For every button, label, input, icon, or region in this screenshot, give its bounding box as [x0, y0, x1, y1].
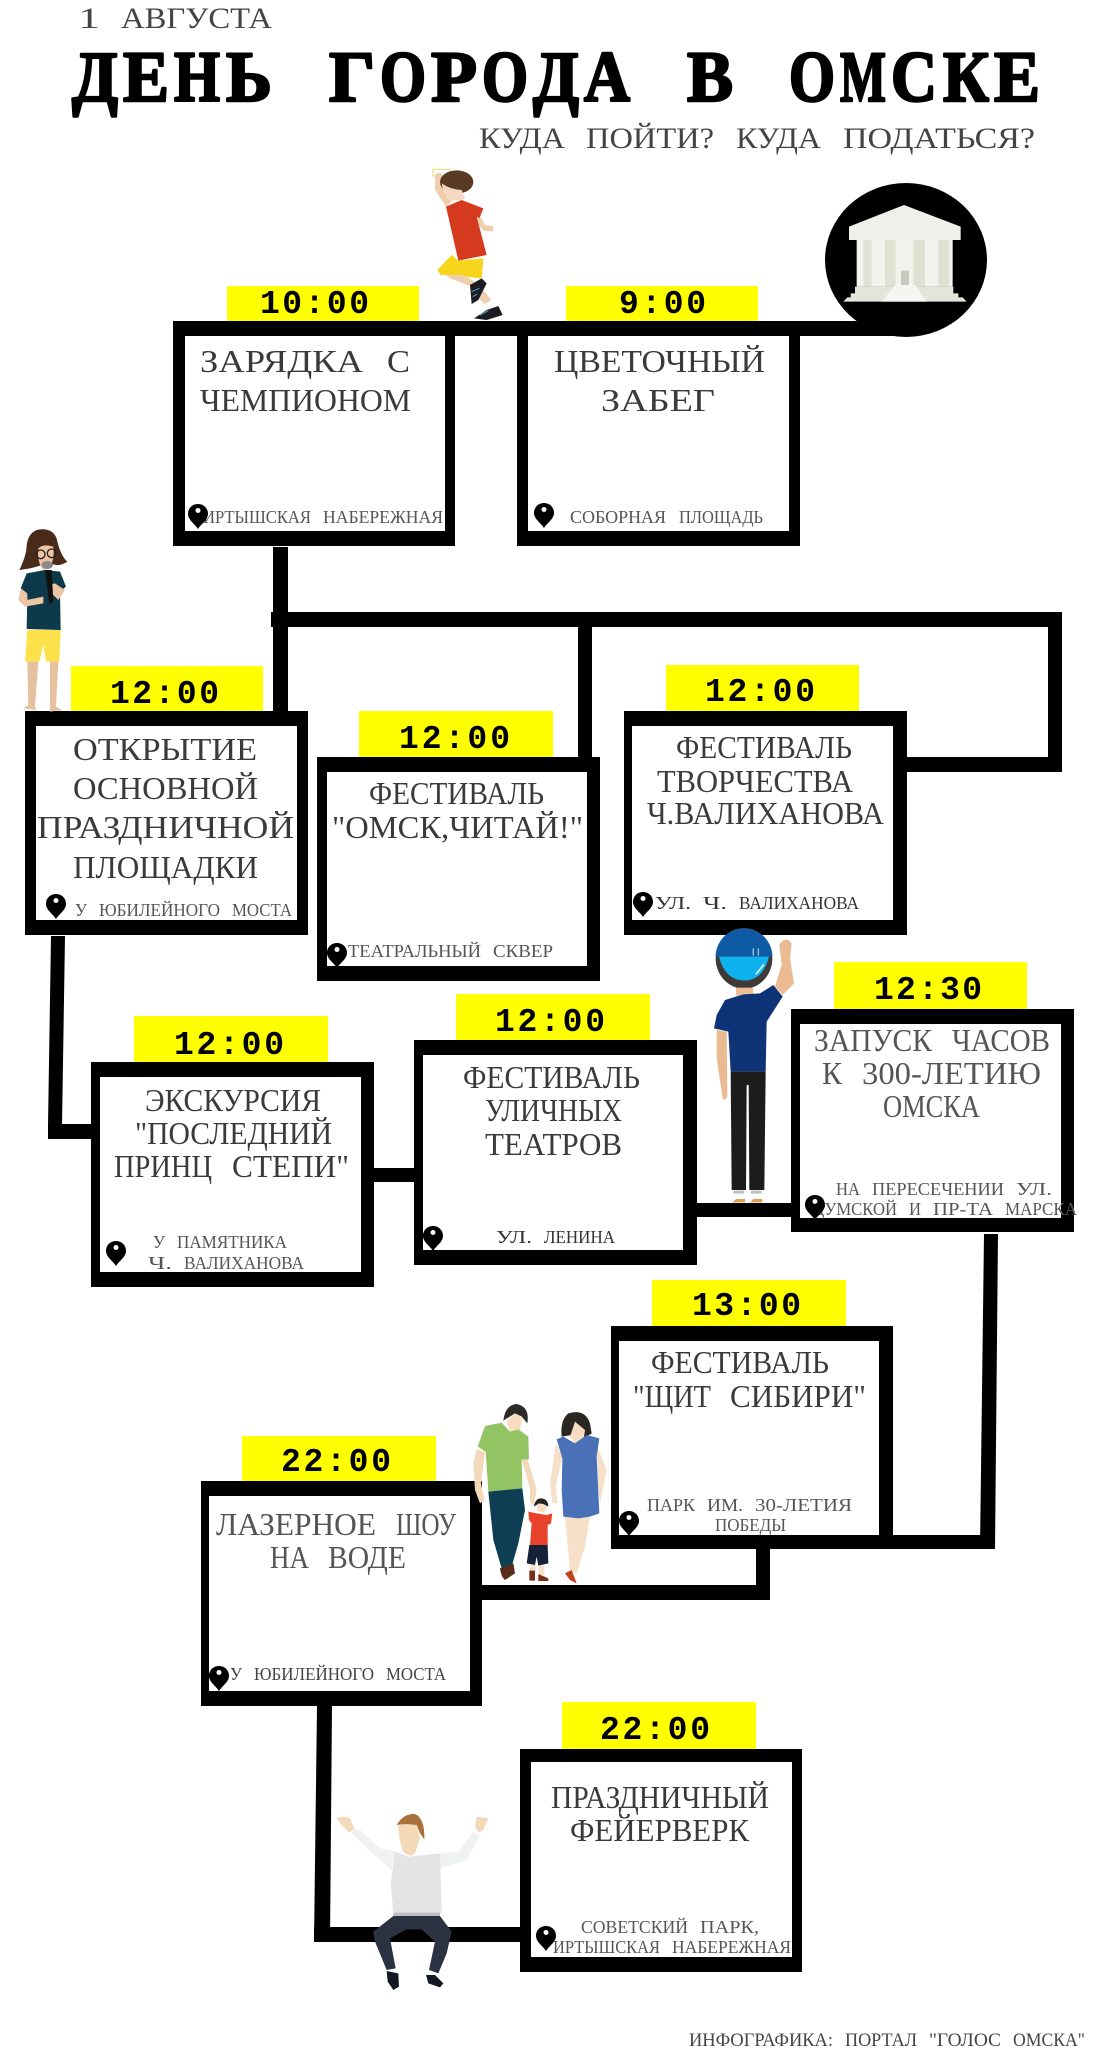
- subtitle: КУДА: [736, 122, 821, 155]
- event name: С: [387, 343, 410, 379]
- credit: ОМСКА": [1013, 2030, 1085, 2051]
- icon: pin: [327, 943, 347, 968]
- event name: ЧЕМПИОНОМ: [200, 382, 411, 418]
- time: 12:00: [174, 1027, 284, 1064]
- panel: 12:00 main stage opening: [25, 666, 308, 935]
- location: ПАРК,: [700, 1917, 759, 1937]
- event name: ФЕЙЕРВЕРК: [570, 1812, 750, 1848]
- event name: ОТКРЫТИЕ: [73, 731, 257, 767]
- icon: pin: [619, 1511, 639, 1536]
- event name: ПРАЗДНИЧНОЙ: [37, 809, 294, 845]
- location: И: [909, 1199, 921, 1219]
- figure: man setting the clock: [714, 928, 794, 1202]
- event name: К: [822, 1055, 843, 1091]
- panel: 10:00 warm-up: [173, 286, 455, 546]
- location: НА: [836, 1179, 860, 1199]
- event name: ЭКСКУРСИЯ: [145, 1082, 321, 1118]
- location: ПР-ТА: [933, 1199, 993, 1219]
- location: ПЕРЕСЕЧЕНИИ: [872, 1179, 1004, 1199]
- location: ЮБИЛЕЙНОГО: [254, 1664, 374, 1684]
- time: 12:00: [495, 1004, 605, 1041]
- event name: ПРИНЦ: [114, 1148, 212, 1184]
- event name: ЦВЕТОЧНЫЙ: [554, 343, 765, 379]
- location: ДУМСКОЙ: [813, 1199, 897, 1219]
- panel: 12:00 street theatres: [414, 994, 697, 1265]
- time: 12:00: [705, 674, 815, 711]
- time: 13:00: [692, 1288, 801, 1325]
- location: СКВЕР: [493, 941, 553, 961]
- credit: ПОРТАЛ: [845, 2030, 917, 2051]
- title: О: [380, 37, 426, 117]
- event name: "ЩИТ: [633, 1378, 711, 1414]
- event name: ПРАЗДНИЧНЫЙ: [551, 1779, 769, 1815]
- event name: "ОМСК,ЧИТАЙ!": [332, 809, 583, 845]
- location: СОВЕТСКИЙ: [581, 1917, 688, 1937]
- event name: ОСНОВНОЙ: [73, 770, 258, 806]
- icon: pin: [106, 1241, 126, 1266]
- location: ТЕАТРАЛЬНЫЙ: [348, 941, 481, 961]
- event name: СИБИРИ": [730, 1378, 866, 1414]
- panel: 12:00 Valikhanov festival: [624, 665, 907, 935]
- panel: 12:30 clock launch: [791, 962, 1077, 1232]
- figure: seated man: [337, 1814, 488, 1990]
- icon: pin: [805, 1195, 825, 1220]
- location: ПАРК: [647, 1495, 696, 1515]
- event name: ФЕСТИВАЛЬ: [651, 1344, 829, 1380]
- panel: 22:00 fireworks: [520, 1702, 802, 1972]
- event name: УЛИЧНЫХ: [485, 1092, 622, 1128]
- location: УЛ.: [655, 893, 691, 913]
- title: Ь: [226, 37, 272, 117]
- location: У: [230, 1664, 242, 1684]
- figure: runner: [433, 169, 503, 320]
- event name: ПЛОЩАДКИ: [73, 849, 258, 885]
- icon: pin: [534, 503, 554, 528]
- event name: ЗАБЕГ: [601, 382, 715, 418]
- panel: 12:00 Omsk read festival: [317, 711, 600, 981]
- time: 22:00: [281, 1444, 391, 1481]
- time: 9:00: [619, 286, 706, 323]
- event name: 300-ЛЕТИЮ: [862, 1055, 1041, 1091]
- event name: ФЕСТИВАЛЬ: [369, 775, 544, 811]
- figure: woman with microphone: [18, 529, 67, 712]
- credit: "ГОЛОС: [929, 2030, 1001, 2051]
- panel: 9:00 flower run: [517, 286, 800, 546]
- location: МОСТА: [232, 900, 292, 920]
- location: Ч.: [703, 893, 727, 913]
- event name: ТВОРЧЕСТВА: [657, 763, 853, 799]
- panel: 12:00 excursion: [91, 1016, 374, 1287]
- panel: 22:00 laser show: [201, 1436, 482, 1706]
- time: 12:00: [399, 721, 510, 758]
- location: УЛ.: [1016, 1179, 1052, 1199]
- location: МОСТА: [386, 1664, 446, 1684]
- subtitle: КУДА: [479, 122, 565, 155]
- location: ИРТЫШСКАЯ: [203, 507, 311, 527]
- event name: ФЕСТИВАЛЬ: [463, 1059, 640, 1095]
- location: ВАЛИХАНОВА: [184, 1253, 304, 1273]
- location: ЛЕНИНА: [544, 1227, 615, 1247]
- location: ИМ.: [707, 1495, 743, 1515]
- title: Е: [123, 37, 169, 117]
- location: ЮБИЛЕЙНОГО: [99, 900, 220, 920]
- title: М: [840, 37, 886, 117]
- event name: ОМСКА: [883, 1088, 980, 1124]
- title: Д: [533, 37, 579, 117]
- title: Г: [329, 37, 375, 117]
- event name: НА: [270, 1539, 309, 1575]
- icon: pin: [536, 1926, 556, 1951]
- event name: ЛАЗЕРНОЕ: [216, 1506, 376, 1542]
- location: ИРТЫШСКАЯ: [553, 1937, 660, 1957]
- credit: ИНФОГРАФИКА:: [689, 2030, 833, 2051]
- location: У: [75, 900, 87, 920]
- date: 1: [78, 2, 100, 35]
- location: МАРСКА: [1005, 1199, 1077, 1219]
- event name: ЗАПУСК: [814, 1022, 933, 1058]
- figure: family: [473, 1404, 607, 1583]
- event name: ВОДЕ: [328, 1539, 406, 1575]
- time: 12:30: [874, 972, 982, 1009]
- date: АВГУСТА: [121, 2, 272, 35]
- icon: pin: [633, 892, 653, 917]
- icon: pin: [46, 894, 66, 919]
- location: ПЛОЩАДЬ: [679, 507, 763, 527]
- location: 30-ЛЕТИЯ: [755, 1495, 852, 1515]
- location: Ч.: [148, 1253, 172, 1273]
- subtitle: ПОДАТЬСЯ?: [843, 122, 1035, 155]
- time: 22:00: [600, 1712, 710, 1749]
- event name: ШОУ: [396, 1506, 456, 1542]
- panel: 13:00 Shield of Siberia: [611, 1280, 893, 1549]
- location: НАБЕРЕЖНАЯ: [672, 1937, 791, 1957]
- location: СОБОРНАЯ: [570, 507, 666, 527]
- event name: Ч.ВАЛИХАНОВА: [647, 795, 884, 831]
- icon: pin: [423, 1226, 443, 1251]
- time: 12:00: [110, 676, 219, 713]
- title: Н: [174, 37, 220, 117]
- event name: "ПОСЛЕДНИЙ: [135, 1115, 332, 1151]
- title: В: [687, 37, 733, 117]
- event name: ЧАСОВ: [952, 1022, 1050, 1058]
- event name: ФЕСТИВАЛЬ: [676, 729, 852, 765]
- location: ВАЛИХАНОВА: [739, 893, 859, 913]
- location: ПОБЕДЫ: [715, 1515, 786, 1535]
- title: О: [482, 37, 528, 117]
- title: Р: [431, 37, 477, 117]
- location: У: [153, 1232, 165, 1252]
- title: К: [943, 37, 989, 117]
- subtitle: ПОЙТИ?: [586, 122, 714, 155]
- title: Д: [72, 37, 118, 117]
- title: А: [584, 37, 630, 117]
- location: ПАМЯТНИКА: [177, 1232, 287, 1252]
- icon: pin: [188, 504, 208, 529]
- time: 10:00: [260, 286, 369, 323]
- connector lines: [48, 321, 1062, 1942]
- event name: СТЕПИ": [232, 1148, 349, 1184]
- title: С: [891, 37, 937, 117]
- location: УЛ.: [496, 1227, 532, 1247]
- title: О: [789, 37, 835, 117]
- event name: ЗАРЯДКА: [200, 343, 363, 379]
- icon: pin: [209, 1666, 229, 1691]
- location: НАБЕРЕЖНАЯ: [323, 507, 443, 527]
- title: Е: [994, 37, 1040, 117]
- icon: city hall in black circle: [825, 183, 987, 337]
- event name: ТЕАТРОВ: [485, 1126, 622, 1162]
